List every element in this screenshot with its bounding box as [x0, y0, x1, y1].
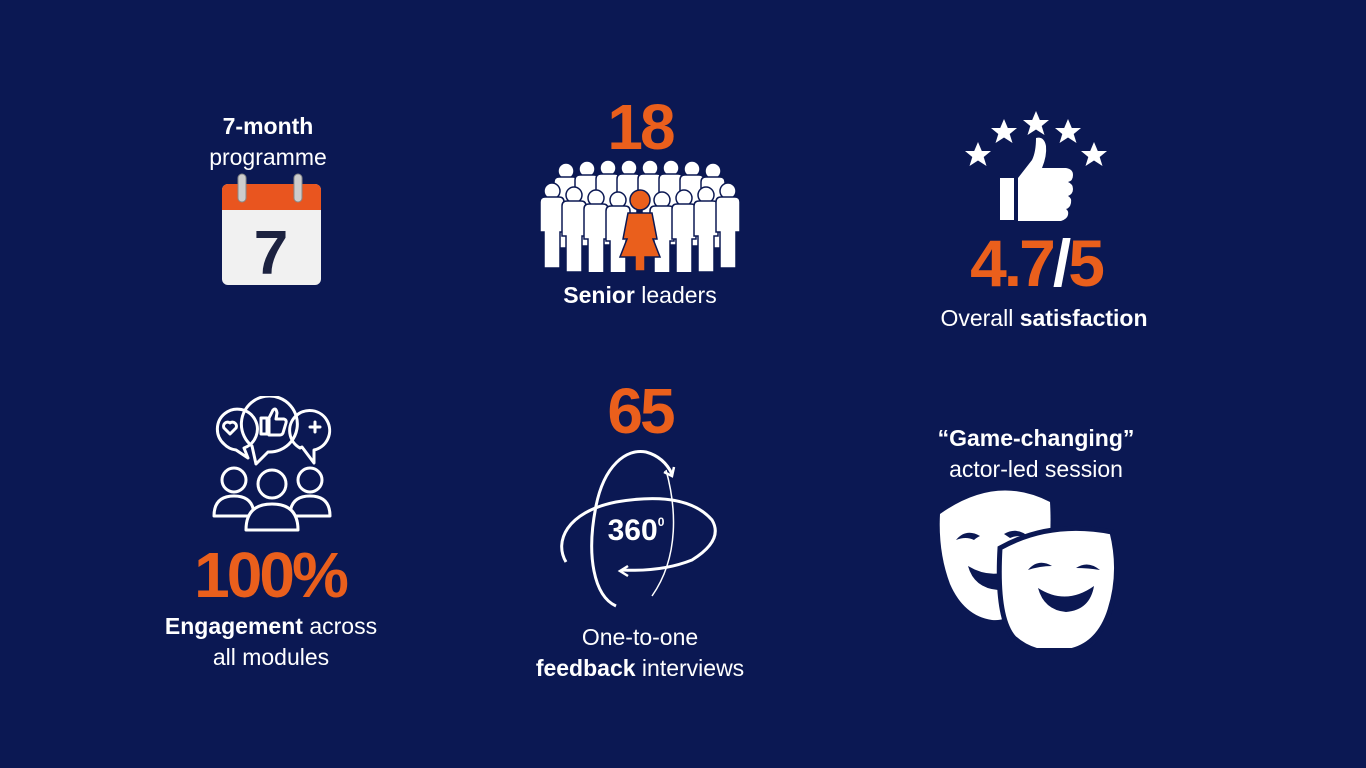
- text: Overall satisfaction: Overall satisfaction: [940, 305, 1148, 331]
- text: Game-changing actor-led session: “Game-changing”: [938, 425, 1134, 451]
- icon: crowd of people: [540, 160, 740, 272]
- icon: engagement people with speech bubbles: [212, 396, 332, 532]
- icon: 360 degree rotation: 360: [608, 514, 658, 547]
- text: 7-month programme: programme: [209, 144, 327, 170]
- icon: calendar: 7: [254, 219, 288, 288]
- text: Engagement across all modules: all modules: [213, 644, 329, 670]
- text: 7-month programme: 7-month: [223, 113, 313, 139]
- text: One-to-one feedback interviews: feedback interviews: [536, 655, 744, 681]
- text: Engagement across all modules: [165, 613, 377, 670]
- icon: 360 degree rotation: 0: [658, 515, 665, 529]
- text: Engagement across all modules: Engagement across: [165, 613, 377, 639]
- text: One-to-one feedback interviews: One-to-one: [582, 624, 698, 650]
- number: 18: 18: [607, 91, 673, 163]
- number: 100%: 100%: [194, 539, 346, 611]
- number: 4.7/5: 4.7/5: [970, 226, 1102, 300]
- number: 65: 65: [607, 375, 673, 447]
- text: One-to-one feedback interviews: [536, 624, 744, 681]
- text: Game-changing actor-led session: actor-led session: [949, 456, 1123, 482]
- text: 7-month programme: [209, 113, 327, 170]
- icon: 360 degree rotation: [560, 450, 717, 608]
- text: Game-changing actor-led session: [938, 425, 1134, 482]
- text: Senior leaders: Senior leaders: [563, 282, 717, 308]
- icon: stars and thumbs up: [965, 111, 1107, 221]
- icon: calendar: [222, 174, 321, 288]
- icon: theatre masks: [940, 490, 1114, 648]
